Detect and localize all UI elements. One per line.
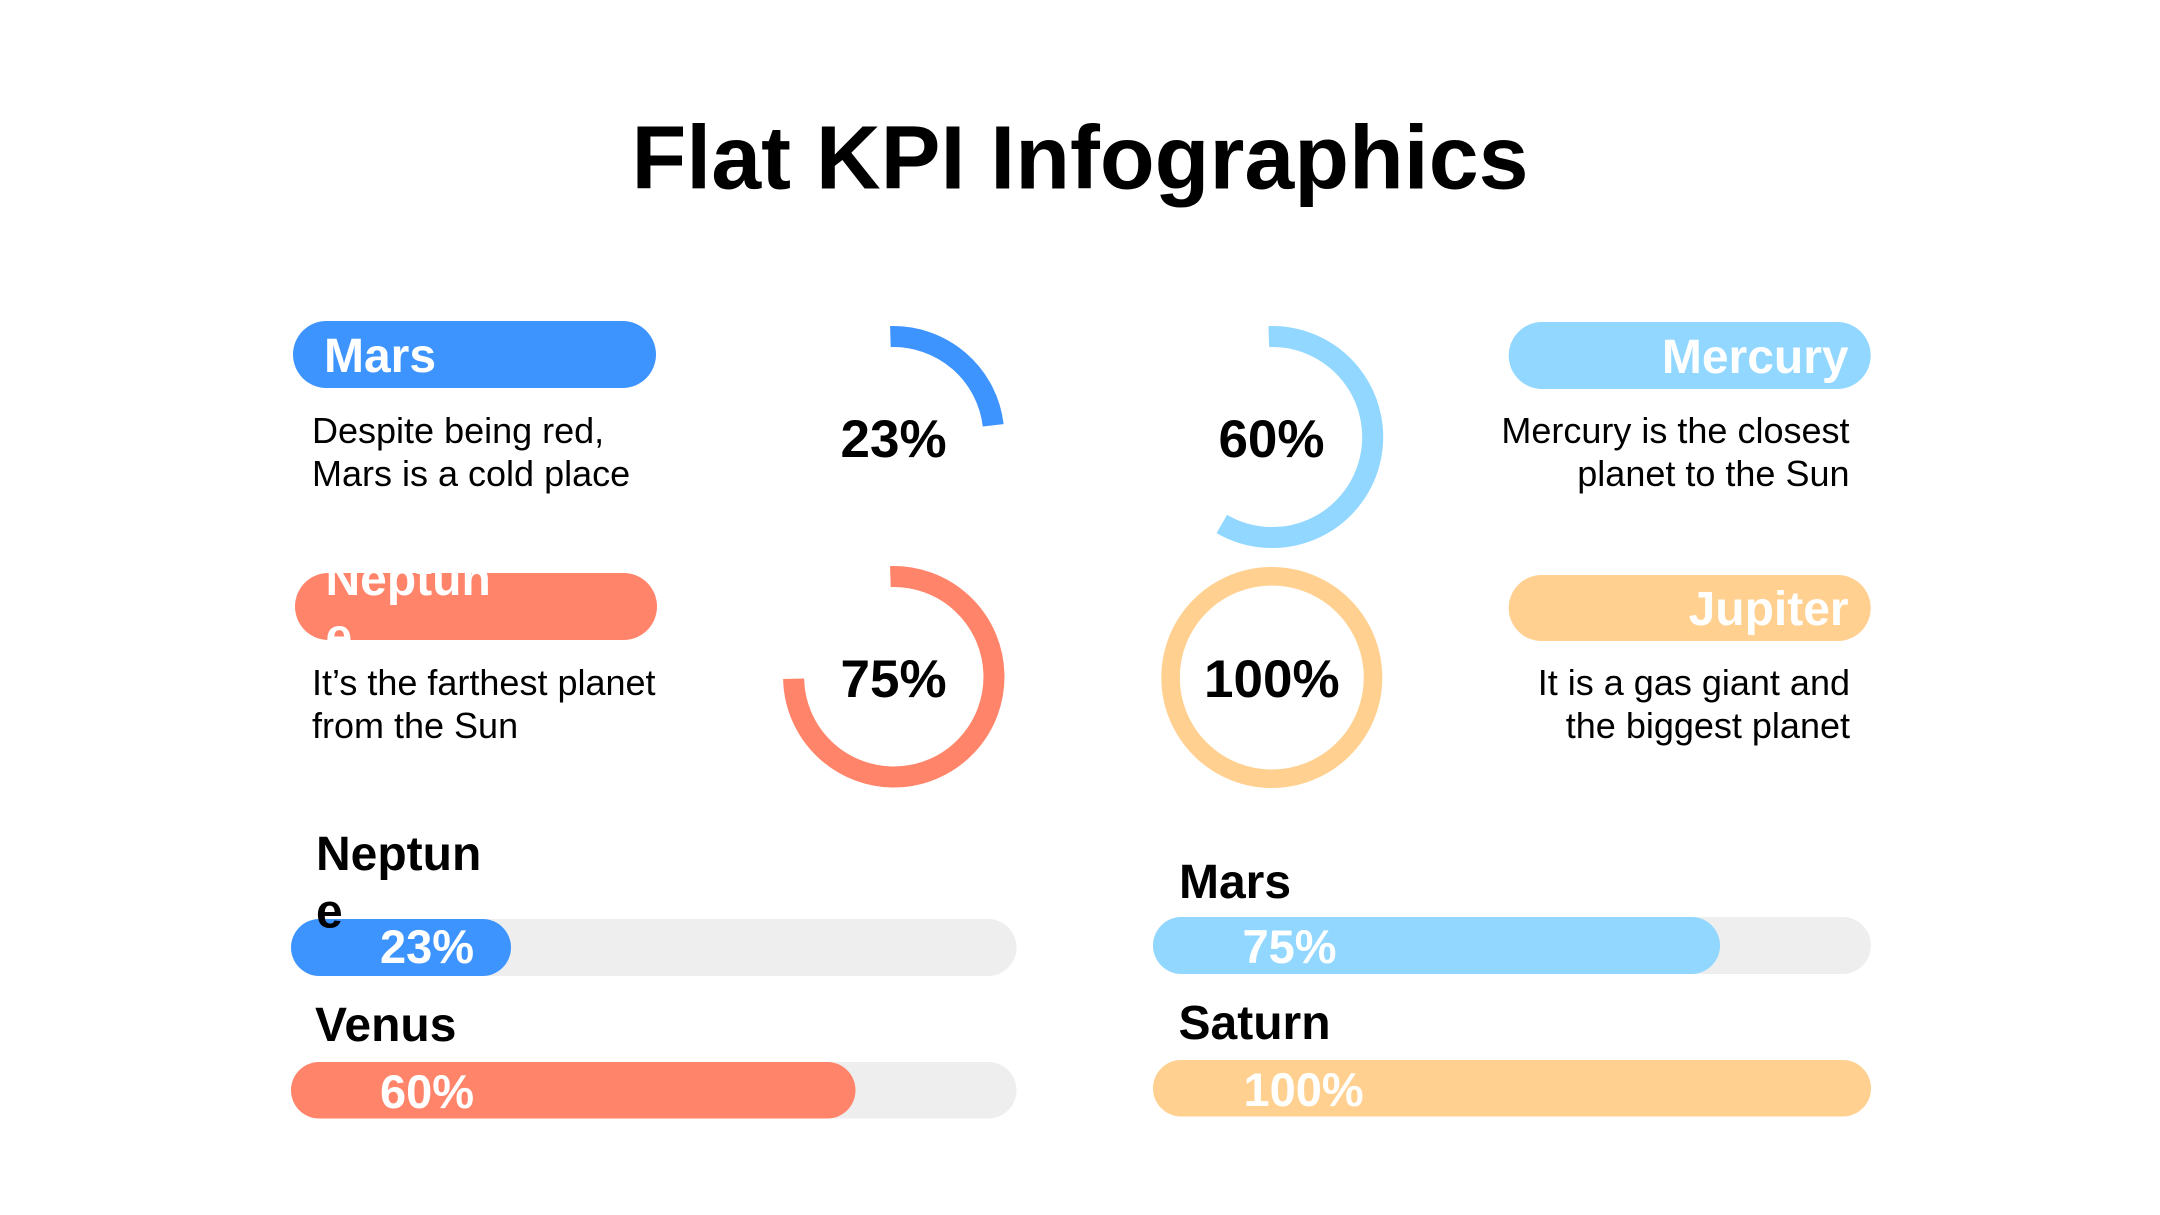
progress bar: Neptune 23%: Neptun <box>316 828 481 881</box>
pill: Jupiter <box>1509 575 1871 641</box>
progress bar: Saturn 100%: 100% <box>1244 1063 1364 1116</box>
progress bar: Neptune 23%: e <box>316 886 343 938</box>
progress bar: Saturn 100%: Saturn <box>1178 997 1331 1050</box>
donut: Mars 23%: 23% <box>841 410 947 469</box>
description: Neptune: It’s the farthest planet <box>312 662 656 703</box>
panel: Jupiter KPI <box>1171 575 1871 779</box>
progress bar: Venus 60% <box>291 999 1016 1118</box>
description: Mercury: planet to the Sun <box>1577 453 1850 494</box>
progress bar: Mars 75%: Mars <box>1179 856 1291 909</box>
panel: Mercury KPI <box>1218 322 1871 538</box>
pill: Jupiter: Jupiter <box>1689 583 1849 636</box>
progress bar: Saturn 100% <box>1153 997 1871 1116</box>
progress bar: Neptune 23% <box>291 828 1016 976</box>
title: Flat KPI Infographics <box>632 108 1528 208</box>
description: Jupiter: It is a gas giant and <box>1538 662 1850 703</box>
pill: Neptune: e <box>326 610 352 663</box>
description: Neptune: from the Sun <box>312 705 518 746</box>
donut: Neptune 75%: 75% <box>841 650 947 709</box>
panel: Neptune KPI <box>295 553 994 777</box>
description: Mars: Despite being red, <box>312 410 604 451</box>
panel: Mars KPI <box>293 321 993 494</box>
progress bar: Venus 60%: Venus <box>315 999 456 1052</box>
description: Jupiter: the biggest planet <box>1566 705 1850 746</box>
pill: Mercury: Mercury <box>1662 331 1849 384</box>
description: Mars: Mars is a cold place <box>312 453 630 494</box>
donut: Jupiter 100%: 100% <box>1204 650 1340 709</box>
pill: Mars: Mars <box>324 330 436 383</box>
progress bar: Neptune 23%: 23% <box>380 920 474 973</box>
donut: Mercury 60%: 60% <box>1218 410 1325 469</box>
donut: Mars 23% <box>841 337 993 469</box>
progress bar: Venus 60%: 60% <box>380 1065 474 1118</box>
pill: Mars <box>293 321 656 388</box>
donut: Neptune 75% <box>794 577 994 777</box>
pill: Neptune <box>295 573 657 640</box>
donut: Jupiter 100% <box>1171 576 1373 779</box>
donut: Mercury 60% <box>1218 337 1373 538</box>
pill: Mercury <box>1509 322 1871 389</box>
description: Mercury: Mercury is the closest <box>1501 410 1850 451</box>
progress bar: Mars 75%: 75% <box>1242 920 1337 973</box>
progress bar: Mars 75% <box>1153 856 1871 974</box>
pill: Neptune: Neptun <box>326 553 491 606</box>
